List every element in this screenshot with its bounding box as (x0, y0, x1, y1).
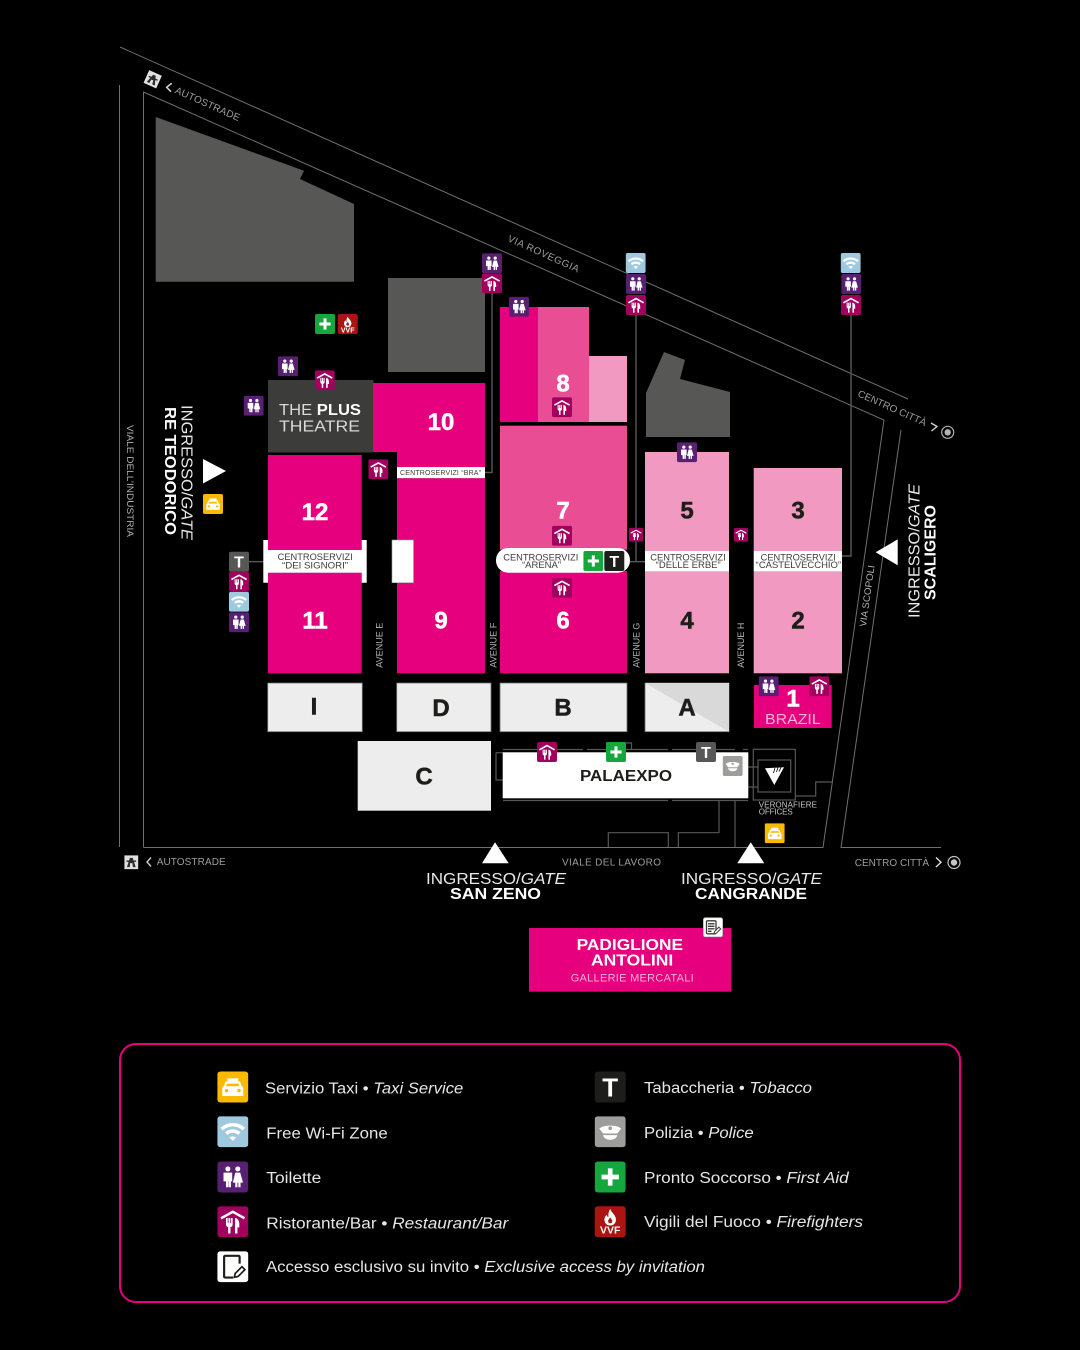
hall d: D (432, 695, 450, 722)
road label: autostrade bottom: AUTOSTRADE (157, 857, 226, 868)
hall c (358, 741, 491, 811)
legend item: invitation access: Accesso esclusivo su invito • Exclusive access by invitation (266, 1259, 705, 1276)
icon: wifi delle erbe (626, 253, 646, 273)
gate: cangrande: CANGRANDE (695, 886, 807, 903)
hall c: C (415, 763, 433, 790)
grey area: central block (388, 278, 485, 372)
icon: restaurant delle erbe (626, 295, 646, 315)
hall 10 (373, 383, 485, 467)
hall 7 (500, 426, 627, 550)
gate: san zeno: SAN ZENO (450, 886, 541, 903)
legend item: wifi: Free Wi-Fi Zone (266, 1125, 388, 1142)
hall 8: 8 (556, 371, 570, 398)
hall 4: 4 (680, 607, 694, 634)
centroservizi dei signori (263, 540, 367, 583)
legend item: police (595, 1116, 754, 1147)
gate: san zeno (426, 842, 567, 903)
grey area: east block (646, 352, 730, 437)
icon: tobacco arena: T (609, 554, 619, 571)
icon: restaurant north central (482, 273, 502, 293)
icon: taxi cangrande (765, 823, 785, 843)
legend item: first aid: Pronto Soccorso • First Aid (644, 1170, 850, 1187)
hall 8 (500, 307, 627, 422)
hall: the plus theatre: THE PLUS (279, 402, 361, 419)
map icons: services (203, 253, 861, 843)
hall 1 brazil: 1 (786, 686, 800, 713)
veronafiere offices: VERONAFIERE (759, 801, 817, 810)
gate: san zeno: INGRESSO/ GATE (426, 871, 567, 888)
gate: re teodorico: INGRESSO/ GATE (178, 405, 194, 541)
hall 5 (645, 452, 729, 551)
road label: centro citta diagonal (856, 387, 954, 438)
centroservizi delle erbe (645, 551, 729, 572)
hall 11 (268, 573, 362, 673)
legend item: taxi: Servizio Taxi • Taxi Service (265, 1080, 464, 1097)
centroservizi castelvecchio: “CASTELVECCHIO” (756, 560, 841, 570)
hall b (500, 683, 627, 732)
hall: the plus theatre: THEATRE (279, 419, 360, 436)
padiglione antolini (529, 928, 731, 992)
icon: tobacco palaexpo (696, 742, 716, 762)
icon: restaurant avenue g (629, 528, 643, 542)
icon: toilet north central (482, 253, 502, 273)
icon: taxi teodorico (203, 494, 223, 514)
centroservizi arena (496, 548, 630, 573)
panel: legend (120, 1044, 960, 1302)
legend item: wifi (217, 1116, 388, 1147)
centroservizi arena: CENTROSERVIZI (503, 552, 578, 562)
legend item: tobacco: Tabaccheria • Tobacco (644, 1080, 812, 1097)
icon: restaurant avenue e (368, 459, 388, 479)
road label: viale del lavoro: VIALE DEL LAVORO (562, 858, 661, 868)
icon: wifi castelvecchio (841, 253, 861, 273)
palaexpo (503, 752, 748, 798)
icon: restaurant palaexpo (537, 742, 557, 762)
road label: autostrade diagonal: AUTOSTRADE (173, 85, 242, 124)
road label: viale dell'industria: VIALE DELL’INDUSTRIA (124, 425, 135, 538)
avenue e label: AVENUE E (374, 623, 386, 668)
gate: scaligero (876, 483, 940, 618)
hall 4 (645, 572, 729, 673)
icon: restaurant hall 6 (552, 578, 572, 598)
hall: the plus theatre (268, 380, 374, 452)
gate: cangrande (681, 842, 823, 903)
road label: autostrade bottom (124, 855, 226, 869)
icon: firefighters north (338, 314, 358, 334)
centroservizi castelvecchio: CENTROSERVIZI (761, 552, 836, 562)
icon: first aid north (315, 314, 335, 334)
hall 9: 9 (434, 607, 448, 634)
road label: centro citta diagonal: CENTRO CITTÀ (856, 387, 929, 429)
hall 10: 10 (428, 409, 454, 436)
hall 9 (392, 478, 485, 673)
legend item: firefighters (595, 1206, 863, 1237)
centroservizi castelvecchio (754, 551, 842, 572)
icon: restaurant hall 7 (552, 526, 572, 546)
veronafiere offices: OFFICES (759, 807, 793, 816)
hall b: B (554, 695, 572, 722)
gate: scaligero: SCALIGERO (922, 505, 940, 600)
icon: toilet hall 8 (509, 297, 529, 317)
icon: toilet brazil (759, 676, 779, 696)
centroservizi bra (397, 467, 485, 478)
veronafiere offices (753, 749, 832, 816)
icon: police palaexpo (723, 756, 743, 776)
icon: restaurant dei signori (229, 572, 249, 592)
hall 12: 12 (302, 499, 328, 526)
legend item: firefighters: Vigili del Fuoco • Firefighters (644, 1214, 863, 1231)
avenue h label: AVENUE H (736, 623, 747, 668)
gate: cangrande: INGRESSO/ GATE (681, 871, 823, 888)
icon: first aid arena (583, 551, 603, 571)
centroservizi dei signori: CENTROSERVIZI (278, 552, 353, 562)
legend item: first aid (595, 1162, 850, 1192)
palaexpo outline walls (496, 743, 758, 847)
connector lines (248, 290, 851, 562)
gate: scaligero: INGRESSO/GATE (906, 483, 923, 618)
icon: firefighters north: VVF (341, 327, 355, 334)
avenue g label: AVENUE G (632, 623, 642, 668)
gate: re teodorico: RE TEODORICO (161, 407, 178, 535)
hall 2 (754, 572, 842, 673)
icon: tobacco palaexpo: T (701, 745, 711, 762)
icon: wifi dei signori (229, 592, 249, 612)
gate: re teodorico (161, 405, 226, 541)
legend item: restaurant (217, 1206, 509, 1237)
icon: first aid palaexpo (606, 742, 626, 762)
grey area: north-west parking (156, 117, 354, 282)
legend item: toilet (217, 1162, 321, 1192)
legend item: taxi (217, 1072, 464, 1102)
icon: restaurant brazil (809, 676, 829, 696)
road label: via roveggia: VIA ROVEGGIA (506, 234, 581, 275)
hall 1 brazil (754, 685, 832, 728)
road label: centro citta bottom (855, 856, 960, 869)
icon: tobacco dei signori (229, 552, 249, 572)
icon: invitation access on antolini (703, 918, 723, 937)
icon: toilet theatre side (244, 396, 264, 416)
hall 1 brazil: BRAZIL (765, 712, 821, 728)
centroservizi delle erbe: CENTROSERVIZI (650, 552, 726, 562)
legend item: restaurant: Ristorante/Bar • Restaurant/Bar (266, 1215, 509, 1232)
avenue f label: AVENUE F (489, 623, 500, 668)
road label: centro citta bottom: CENTRO CITTÀ (855, 856, 929, 869)
icon: toilet hall 5 (677, 442, 697, 462)
legend item: tobacco (595, 1072, 812, 1102)
icon: toilet theatre top (278, 356, 298, 376)
centroservizi dei signori: “DEI SIGNORI” (282, 560, 348, 570)
icon: restaurant castelvecchio (841, 295, 861, 315)
icon: restaurant theatre (315, 370, 335, 390)
roads and site boundary (120, 47, 941, 848)
legend item: invitation access (217, 1251, 705, 1282)
hall 6: 6 (556, 607, 570, 634)
hall a (645, 683, 729, 732)
hall 2: 2 (791, 607, 805, 634)
hall d (397, 683, 491, 732)
palaexpo: PALAEXPO (580, 768, 672, 785)
legend item: firefighters: VVF (600, 1224, 621, 1236)
legend item: police: Polizia • Police (644, 1125, 754, 1142)
centroservizi arena: “ARENA” (522, 560, 561, 570)
padiglione antolini: ANTOLINI (591, 953, 673, 970)
legend item: toilet: Toilette (266, 1170, 321, 1187)
centroservizi bra: CENTROSERVIZI “BRA” (400, 470, 482, 477)
hall i: I (311, 693, 317, 720)
hall 7: 7 (556, 497, 570, 524)
icon: toilet delle erbe (626, 274, 646, 294)
hall i (268, 683, 362, 732)
icon: restaurant avenue h (734, 528, 748, 542)
icon: toilet castelvecchio (841, 274, 861, 294)
icon: toilet dei signori (229, 612, 249, 632)
icon: restaurant hall 8 (552, 397, 572, 417)
road label: autostrade diagonal (143, 70, 242, 124)
icon: tobacco dei signori: T (234, 554, 244, 572)
hall 6 (500, 571, 627, 673)
hall a: A (678, 695, 696, 722)
legend item: tobacco: T (602, 1072, 618, 1102)
hall 3: 3 (791, 497, 805, 524)
hall 3 (754, 468, 842, 551)
padiglione antolini: GALLERIE MERCATALI (571, 973, 694, 985)
icon: tobacco arena (604, 551, 624, 571)
hall 12 (268, 455, 362, 550)
padiglione antolini: PADIGLIONE (577, 937, 683, 954)
centroservizi delle erbe: “DELLE ERBE” (656, 560, 721, 570)
hall 5: 5 (680, 497, 694, 524)
road label: via scopoli: VIA SCOPOLI (858, 564, 878, 627)
hall 11: 11 (302, 607, 328, 634)
